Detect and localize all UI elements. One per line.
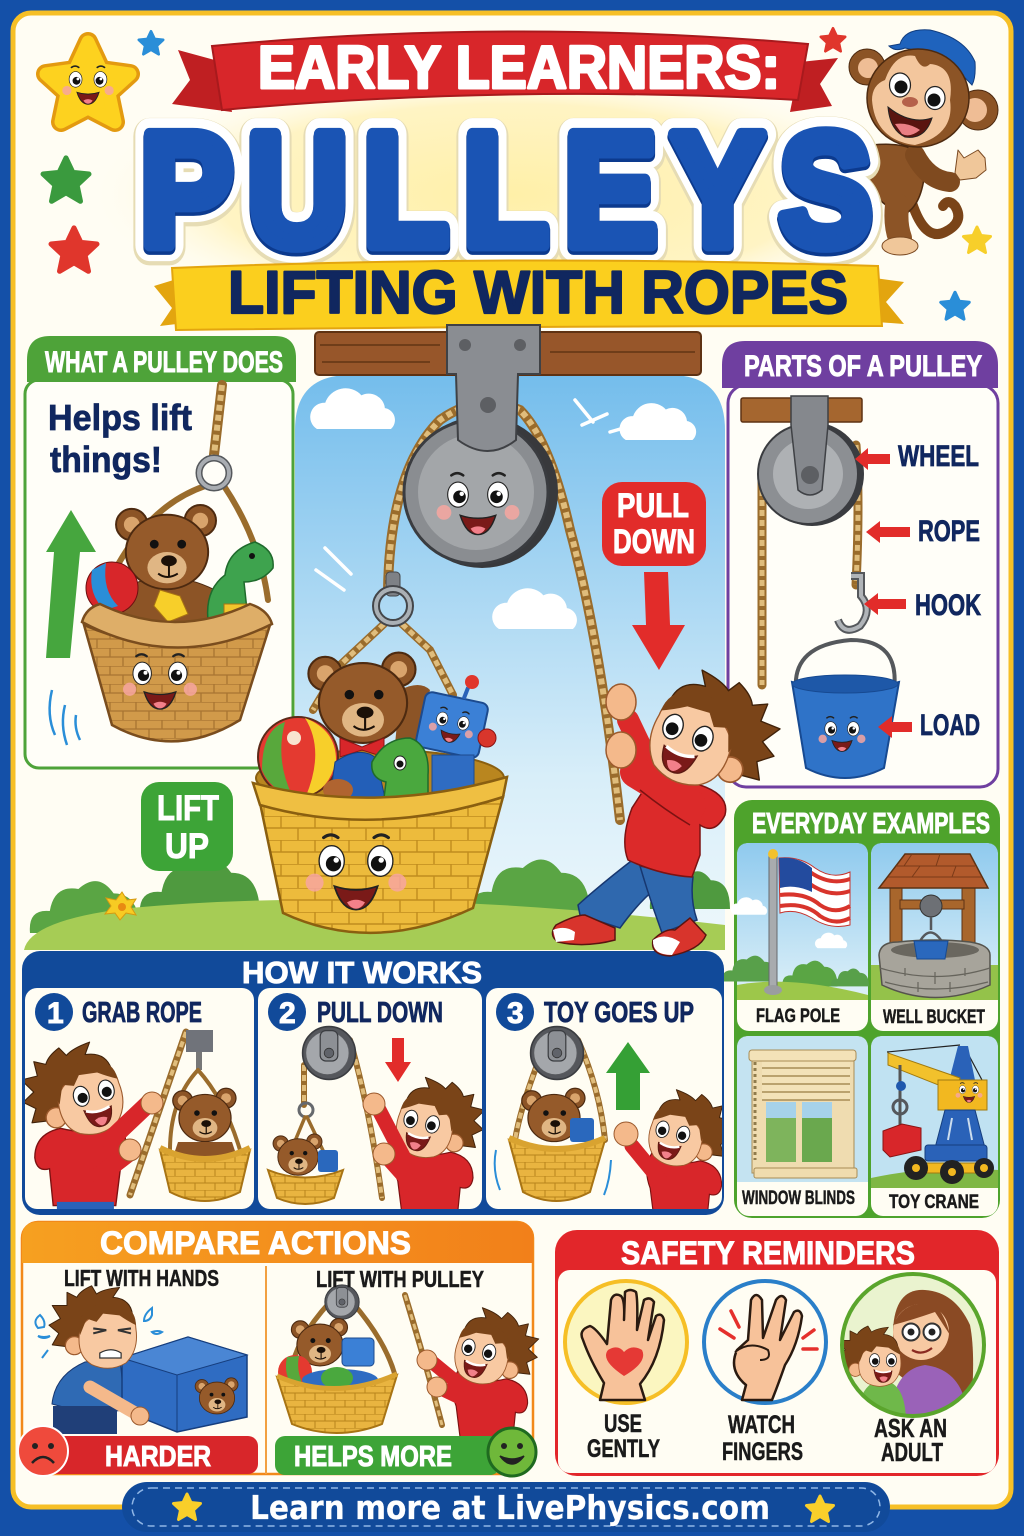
example: window blinds <box>737 1036 868 1216</box>
step 1: 1 <box>47 997 64 1030</box>
decorative stars <box>43 28 991 319</box>
icon: watch fingers: FINGERS <box>722 1438 803 1466</box>
icon: use gently <box>565 1281 687 1463</box>
example: toy crane <box>871 1036 998 1216</box>
label: hook: HOOK <box>915 589 981 622</box>
step 3 <box>486 988 722 1209</box>
example: window blinds: WINDOW BLINDS <box>742 1188 855 1209</box>
icon: use gently: GENTLY <box>587 1435 660 1463</box>
example: well bucket <box>871 843 998 1031</box>
sky background <box>295 375 725 950</box>
main title: pulleys: PULLEYS <box>140 99 872 279</box>
badge: helps more <box>275 1428 536 1476</box>
heading: COMPARE ACTIONS <box>100 1225 411 1261</box>
panel: everyday examples <box>722 800 1000 1218</box>
icon: ask an adult: ASK AN <box>874 1413 947 1443</box>
scene: lifting with hands <box>35 1266 266 1474</box>
heading <box>27 336 296 382</box>
heading <box>722 341 998 388</box>
heading: SAFETY REMINDERS <box>621 1235 915 1271</box>
icon: ask an adult <box>837 1274 984 1467</box>
example: flag pole: FLAG POLE <box>756 1006 840 1027</box>
arrow: pull down <box>632 572 685 670</box>
pulley wheel with face <box>404 325 558 568</box>
scene: lifting with pulley <box>277 1285 546 1452</box>
main title: pulleys: PULLEYS <box>140 101 872 281</box>
callout: pull down: PULL <box>617 487 689 525</box>
step 3: TOY GOES UP <box>544 997 694 1029</box>
footer banner: Learn more at LivePhysics.com <box>250 1488 770 1527</box>
heading: WHAT A PULLEY DOES <box>45 346 283 379</box>
label: load <box>878 709 980 742</box>
callout: pull down: DOWN <box>613 523 695 561</box>
callout: lift up: LIFT <box>157 789 219 828</box>
icon: ask an adult: ADULT <box>881 1437 943 1467</box>
example: flag pole <box>722 843 869 1031</box>
panel: what a pulley does <box>25 336 296 768</box>
text: helps lift things: things! <box>50 439 162 480</box>
step 3: 3 <box>507 997 524 1030</box>
icon: watch fingers: WATCH <box>728 1411 795 1439</box>
icon: watch fingers <box>704 1281 826 1466</box>
clouds <box>311 389 696 628</box>
panel: parts of a pulley <box>722 341 998 787</box>
heading: HOW IT WORKS <box>242 955 482 990</box>
panel: how it works <box>12 951 740 1234</box>
text: helps lift things <box>48 397 192 480</box>
main title: pulleys: PULLEYS <box>140 102 872 282</box>
step 1: GRAB ROPE <box>82 997 202 1029</box>
label: load: LOAD <box>920 709 980 742</box>
main pulley scene <box>24 325 795 956</box>
badge: helps more: HELPS MORE <box>294 1441 452 1473</box>
subtitle ribbon: lifting with ropes: LIFTING WITH ROPES <box>228 259 848 326</box>
step 1 <box>12 988 254 1217</box>
footer banner <box>122 1482 890 1532</box>
step 2: PULL DOWN <box>317 997 443 1029</box>
big yellow basket with face <box>253 777 507 933</box>
grass hill and bushes <box>24 859 730 950</box>
motion marks <box>50 690 80 745</box>
boy pulling rope <box>552 659 795 956</box>
label: lift with hands: LIFT WITH HANDS <box>64 1265 219 1291</box>
step 2: 2 <box>279 997 296 1030</box>
callout: lift up: UP <box>165 827 209 866</box>
badge: harder: HARDER <box>105 1441 211 1473</box>
hook ring <box>376 572 410 623</box>
panel: compare actions <box>18 1222 546 1476</box>
toys in basket <box>256 653 504 806</box>
label: wheel <box>855 440 979 473</box>
example: toy crane: TOY CRANE <box>889 1192 979 1213</box>
icon: star mascot <box>46 42 130 122</box>
title ribbon: early learners: EARLY LEARNERS: <box>258 34 780 101</box>
monkey mascot <box>849 30 998 255</box>
motion marks <box>316 400 634 590</box>
badge: harder <box>18 1426 258 1476</box>
ropes <box>313 403 620 820</box>
main title: pulleys: PULLEYS <box>140 99 872 279</box>
rope and ring <box>115 385 268 600</box>
label: rope: ROPE <box>918 515 980 548</box>
label: rope <box>866 515 980 548</box>
label: hook <box>864 589 981 622</box>
arrow: up <box>46 510 96 658</box>
label: lift with pulley: LIFT WITH PULLEY <box>316 1266 484 1292</box>
callout: lift up <box>141 782 233 871</box>
basket with face <box>82 604 272 741</box>
panel: safety reminders <box>555 1230 999 1476</box>
label: wheel: WHEEL <box>898 440 979 473</box>
icon: use gently: USE <box>604 1410 642 1438</box>
diagram <box>741 396 899 778</box>
text: helps lift things: Helps lift <box>48 397 192 438</box>
example: well bucket: WELL BUCKET <box>883 1007 985 1028</box>
callout: pull down <box>602 482 706 566</box>
toys <box>86 505 273 625</box>
step 2 <box>258 988 482 1209</box>
wooden beam <box>315 332 701 375</box>
